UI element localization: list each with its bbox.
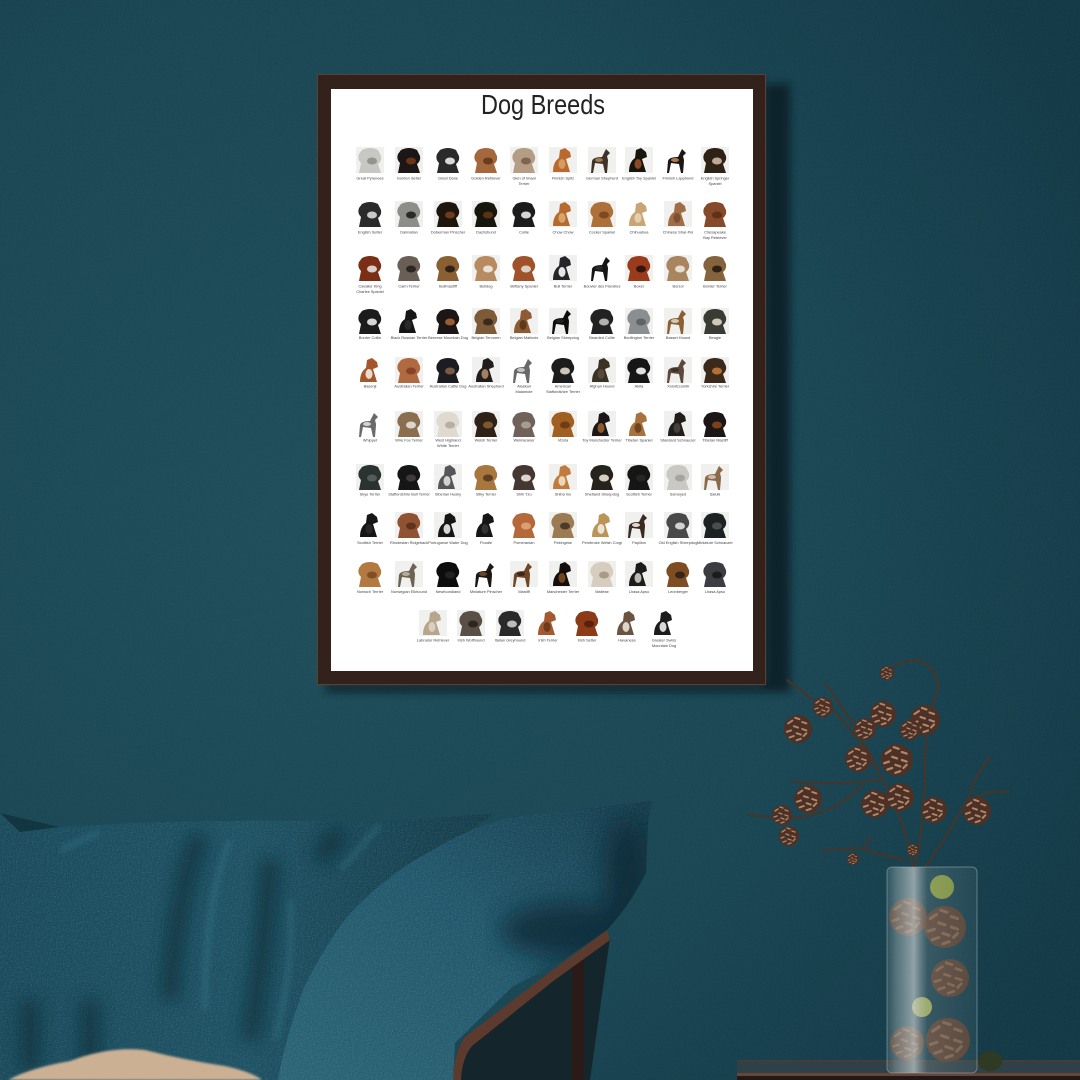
dog: Norwegian Elkhound: Norwegian Elkhound [391,589,427,594]
dog: Norwich Terrier [357,562,384,594]
dog: Skye Terrier [356,464,384,496]
dog: Scottish Terrier: Scottish Terrier [626,492,653,496]
moss on table [978,1051,1002,1071]
dog: Irish Wolfhound: Irish Wolfhound [458,638,484,642]
dog: Rhodesian Ridgeback: Rhodesian Ridgeback [390,540,428,545]
dog: Italian Greyhound [495,610,525,642]
dog: Doberman Pinscher: Doberman Pinscher [431,230,466,234]
dog: Saluki [701,464,729,496]
dog: Vizsla: Vizsla [558,438,569,442]
dog: Whippet: Whippet [363,438,378,442]
dog: Dachshund: Dachshund [476,230,496,234]
dog: Australian Terrier [394,357,424,388]
dog: Rhodesian Ridgeback [390,512,428,545]
title: Dog Breeds [481,89,605,120]
dog: German Shepherd: German Shepherd [586,176,618,180]
dog: Finnish Lapphund [663,149,693,180]
dog: Miniature Pinscher [470,563,503,594]
dog: Miniature Schnauzer [697,512,734,545]
vase with pine cones [737,660,1080,1080]
dog: Akita: Akita [635,384,644,388]
dog: Scottish Terrier [625,464,653,496]
dog: Shih Tzu [512,465,535,496]
dog: Shetland Sheepdog [585,465,619,496]
dog: Leonberger: Leonberger [668,589,689,594]
dog: Newfoundland [436,562,460,594]
dog: Great Pyrenees [356,147,384,180]
dog: West Highland White Terrier: White Terrier [437,443,460,448]
frame [317,74,766,685]
dog: Alaskan Malamute: Alaskan [517,384,531,388]
dog: Lhasa Apso: Lhasa Apso [705,589,725,594]
dog: Cocker Spaniel [588,201,616,234]
right cushion [270,800,660,1080]
dog: Chesapeake Bay Retriever: Chesapeake [704,230,726,234]
dog: Samoyed: Samoyed [670,492,686,496]
dog: Tibetan Mastiff [702,412,729,442]
dog: Basset Hound: Basset Hound [666,335,690,340]
dog: Great Pyrenees: Great Pyrenees [356,176,384,180]
dog: Welsh Terrier [472,411,500,442]
dog: Poodle: Poodle [480,540,492,545]
dog: Chinese Shar-Pei: Chinese Shar-Pei [663,230,693,234]
dog: Portuguese Water Dog: Portuguese Water Dog [428,540,468,545]
dog: Chesapeake Bay Retriever [703,202,727,240]
dog: Finnish Spitz: Finnish Spitz [552,176,574,180]
dog: Pomeranian: Pomeranian [514,540,534,545]
dog: Black Russian Terrier [391,309,428,340]
dog: Beagle [701,308,729,340]
breed grid [356,147,734,648]
dog: Great Dane: Great Dane [438,176,458,180]
dog: Pomeranian [512,513,535,545]
dog: Cavalier King Charles Spaniel [356,256,384,294]
dog: Beagle: Beagle [709,335,721,340]
dog: Miniature Schnauzer: Miniature Schnauzer [697,540,734,545]
dog: Labrador Retriever [417,610,450,642]
dog: Brittany Spaniel: Brittany Spaniel [510,284,538,288]
dog: Mastiff: Mastiff [518,589,531,594]
dog: Alaskan Malamute: Malamute [515,389,533,394]
dog: English Setter: English Setter [358,230,383,234]
dog: Xoloitzcuintli: Xoloitzcuintli [667,384,689,388]
dog: Norwegian Elkhound [391,561,427,594]
dog: Manchester Terrier: Manchester Terrier [547,589,580,594]
dog: Weimaraner [512,412,535,442]
dog: Shiba Inu [549,464,577,496]
dog: Shiba Inu: Shiba Inu [555,492,571,496]
dog: Old English Sheepdog: Old English Sheepdog [659,540,697,545]
dog: Black Russian Terrier: Black Russian Terrier [391,335,428,340]
dog: Xoloitzcuintli [664,357,692,388]
dog: Borzoi [664,255,692,288]
dog: Maltese [588,561,616,594]
dog: Labrador Retriever: Labrador Retriever [417,638,450,642]
dog: Portuguese Water Dog [428,512,468,545]
dog: Silky Terrier [474,465,497,496]
dog: Belgian Malinois [510,308,538,340]
dog: Bull Terrier [549,255,577,288]
glass vase [887,867,977,1073]
dog: Afghan Hound [588,357,616,388]
dog: Boxer: Boxer [634,284,645,288]
dog: Tibetan Spaniel [626,412,653,442]
dog: Newfoundland: Newfoundland [436,589,460,594]
dog: Bulldog: Bulldog [480,284,492,288]
dog: Basenji [360,358,378,388]
fur throw [8,1049,262,1080]
dog: Collie: Collie [519,230,529,234]
dog: Shetland Sheepdog: Shetland Sheepdog [585,492,619,496]
dog: Lhasa Apso [703,562,726,594]
dog: Irish Terrier: Irish Terrier [538,638,558,642]
dog: Bernese Mountain Dog [428,309,468,340]
dog: Samoyed [664,464,692,496]
dog: Silky Terrier: Silky Terrier [476,492,497,496]
dog: Border Collie [358,309,381,340]
dog: Akita [625,357,653,388]
dog: Toy Manchester Terrier: Toy Manchester Terrier [582,438,622,442]
dog: Italian Greyhound: Italian Greyhound [495,638,525,642]
dog: Papillon [625,512,653,545]
poster [317,74,766,685]
dog: Golden Retriever: Golden Retriever [471,176,501,180]
dog: Bullmastiff: Bullmastiff [439,284,458,288]
dog: Siberian Husky [434,464,462,496]
dog: Brittany Spaniel [510,256,538,288]
dog: Bernese Mountain Dog: Bernese Mountain Dog [428,335,468,340]
dog: German Shepherd [586,147,618,180]
dog: Australian Shepherd [468,357,504,388]
dog: Basset Hound [664,308,692,340]
dog: West Highland White Terrier [434,411,462,448]
dog: Glen of Imaal Terrier: Glen of Imaal [512,176,536,180]
dog: Pekingese [549,512,577,545]
dog: Australian Cattle Dog [430,358,466,388]
dog: Doberman Pinscher [431,201,466,234]
dog: Bouvier des Flandres [584,257,620,288]
dog: Yorkshire Terrier: Yorkshire Terrier [701,384,730,388]
dog: Maltese: Maltese [595,589,609,594]
dog: Standard Schnauzer: Standard Schnauzer [660,438,696,442]
dog: Australian Cattle Dog: Australian Cattle Dog [430,384,466,388]
dog: Alaskan Malamute [513,359,533,394]
dog: Shih Tzu: Shih Tzu [516,492,532,496]
dog: Staffordshire Bull Terrier: Staffordshire Bull Terrier [388,492,430,496]
dog: Gordon Setter: Gordon Setter [397,176,422,180]
dog: Miniature Pinscher: Miniature Pinscher [470,589,503,594]
dog: West Highland White Terrier: West Highland [435,438,461,442]
dog: Standard Schnauzer [660,411,696,442]
dog: Cavalier King Charles Spaniel: Cavalier King [358,284,382,288]
dog: Glen of Imaal Terrier: Terrier [518,181,530,186]
poster frame shadow [326,84,790,692]
dog: Dalmatian: Dalmatian [400,230,418,234]
dog: Tibetan Spaniel: Tibetan Spaniel [626,438,653,442]
dog: Bull Terrier: Bull Terrier [554,284,573,288]
dog: Havanese [617,611,636,642]
dog: Chow Chow: Chow Chow [553,230,574,234]
dog: Irish Terrier [538,611,558,642]
dog: Greater Swiss Mountain Dog [652,611,676,648]
dog: Irish Wolfhound [457,610,485,642]
dog: Wire Fox Terrier: Wire Fox Terrier [395,438,423,442]
dog: Cocker Spaniel: Cocker Spaniel [589,230,615,234]
dog: Siberian Husky: Siberian Husky [435,492,461,496]
dog: Scottish Terrier: Scottish Terrier [357,540,384,545]
dog: Bulldog [472,255,500,288]
dog: Cairn Terrier: Cairn Terrier [398,284,420,288]
dog: Dachshund [472,201,500,234]
dog: Finnish Lapphund: Finnish Lapphund [663,176,693,180]
dog: Tibetan Mastiff: Tibetan Mastiff [702,438,729,442]
dog: Bearded Collie [589,309,615,340]
dog: Norwich Terrier: Norwich Terrier [357,589,384,594]
vase contents [889,875,970,1062]
dog: Border Collie: Border Collie [359,335,381,340]
dog: Collie [512,202,535,234]
dog: Havanese: Havanese [618,638,636,642]
dog: Bouvier des Flandres: Bouvier des Flandres [584,284,620,288]
dog: Lhasa Apso [625,561,653,594]
dog: Irish Setter: Irish Setter [578,638,597,642]
dog: Chow Chow [549,201,577,234]
dog: Mastiff [510,561,538,594]
dog: Chesapeake Bay Retriever: Bay Retriever [703,235,727,240]
dog: Dalmatian [395,201,423,234]
dog: English Springer Spaniel [701,147,730,186]
dog: Manchester Terrier [547,561,580,594]
dog: Bullmastiff [436,256,459,288]
dog: Belgian Tervuren [471,308,501,340]
dog: Borzoi: Borzoi [672,284,684,288]
dog: English Springer Spaniel: English Springer [701,176,729,180]
dog: Basenji: Basenji [364,384,377,388]
dog: Gordon Setter [395,147,423,180]
dog: Lhasa Apso: Lhasa Apso [629,589,649,594]
dog: Belgian Malinois: Belgian Malinois [510,335,538,340]
dog: Vizsla [549,411,577,442]
dog: Bearded Collie: Bearded Collie [589,335,615,340]
dog: Chihuahua: Chihuahua [630,230,649,234]
dog: Welsh Terrier: Welsh Terrier [475,438,498,442]
dog: Irish Setter [575,611,598,642]
dog: Border Terrier [703,256,728,288]
dog: Greater Swiss Mountain Dog: Greater Swiss [652,638,676,642]
dog: Weimaraner: Weimaraner [513,438,535,442]
dog: Finnish Spitz [549,147,577,180]
dog: Staffordshire Bull Terrier [388,465,430,496]
dog: American Staffordshire Terrier: American [555,384,571,388]
dog: Whippet [359,413,378,442]
dog: English Setter [358,202,383,234]
dog: Australian Terrier: Australian Terrier [394,384,424,388]
dog: Boxer [625,255,653,288]
table [737,1060,1080,1080]
dog: Belgian Sheepdog [547,308,579,340]
dog: Chinese Shar-Pei [663,201,693,234]
dog: Golden Retriever [471,148,501,180]
dog: Bedlington Terrier [624,308,655,340]
dog: Belgian Tervuren: Belgian Tervuren [471,335,501,340]
dog: Poodle [476,513,494,545]
chair frame [453,930,610,1080]
dog: Cavalier King Charles Spaniel: Charles Spaniel [356,289,384,294]
dog: Toy Manchester Terrier [582,411,622,442]
dog: American Staffordshire Terrier: Staffordshire Terrier [546,389,581,394]
branches [748,660,1008,867]
dog: Yorkshire Terrier [701,357,730,388]
dog: Great Dane [436,148,459,180]
dog: Glen of Imaal Terrier [510,147,538,186]
dog: Wire Fox Terrier [395,411,423,442]
dog: English Springer Spaniel: Spaniel [709,181,722,186]
dog: Border Terrier: Border Terrier [703,284,728,288]
dog: Leonberger [666,562,689,594]
dog: Skye Terrier: Skye Terrier [360,492,381,496]
dog: Australian Shepherd: Australian Shepherd [468,384,504,388]
dog: Saluki: Saluki [710,492,720,496]
dog: Belgian Sheepdog: Belgian Sheepdog [547,335,579,340]
dog: Pembroke Welsh Corgi: Pembroke Welsh Corgi [582,540,622,545]
dog: Chihuahua [629,202,649,234]
dog: English Toy Spaniel: English Toy Spaniel [622,176,656,180]
dog: Pekingese: Pekingese [554,540,572,545]
dog: Greater Swiss Mountain Dog: Mountain Dog [652,643,676,648]
dog: Scottish Terrier [357,513,384,545]
dog: Bedlington Terrier: Bedlington Terrier [624,335,655,340]
left cushion [0,800,520,1080]
dog: Old English Sheepdog [659,512,697,545]
pine cones on branches [772,666,991,865]
dog: Pembroke Welsh Corgi [582,513,622,545]
dog: English Toy Spaniel [622,147,656,180]
sofa with cushions [0,800,660,1080]
dog: American Staffordshire Terrier [546,358,581,394]
dog: Afghan Hound: Afghan Hound [590,384,614,388]
dog: Cairn Terrier [397,256,420,288]
dog: Papillon: Papillon [632,540,646,545]
